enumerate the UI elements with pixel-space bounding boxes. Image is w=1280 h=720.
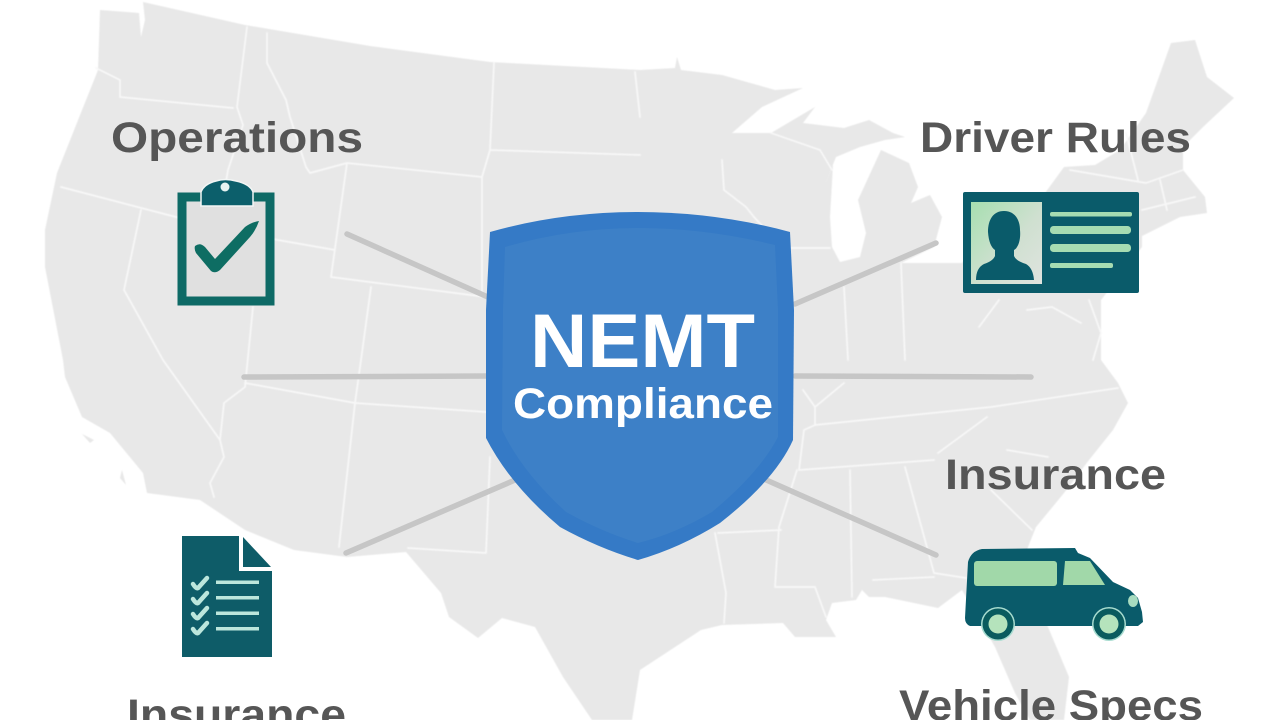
front window <box>1063 561 1105 585</box>
connector: insurance document <box>346 480 515 553</box>
connector: operations <box>347 234 490 298</box>
folded corner <box>243 537 271 567</box>
document body <box>182 536 272 657</box>
connector: vehicle <box>764 479 936 555</box>
central shield <box>486 212 794 560</box>
connector: west <box>244 376 490 377</box>
checkmark <box>195 221 259 272</box>
connector: east <box>795 376 1031 377</box>
headlight <box>1128 595 1138 607</box>
channel islands <box>82 434 126 485</box>
clip hole <box>220 182 230 192</box>
heading: Insurance (right): Insurance <box>945 451 1166 499</box>
text bar 4 <box>1050 263 1113 268</box>
icon: insurance document <box>182 536 272 657</box>
clipboard clip <box>201 180 253 206</box>
heading: Driver Rules: Driver Rules <box>920 114 1191 162</box>
shield title NEMT: NEMT <box>530 299 755 384</box>
clipboard paper <box>182 197 270 301</box>
person silhouette <box>976 211 1034 280</box>
checklist ticks <box>193 578 207 633</box>
card body <box>963 192 1139 293</box>
rear wheel <box>981 607 1015 641</box>
text bar 1 <box>1050 212 1132 216</box>
icon: clipboard with checkmark <box>182 180 270 301</box>
van body <box>965 548 1143 626</box>
connector: driver rules <box>795 243 936 304</box>
icon: driver ID card <box>963 192 1139 293</box>
shield inner face <box>502 228 778 543</box>
state borders <box>61 27 1195 623</box>
rear window <box>974 561 1057 586</box>
connector lines <box>244 234 1031 555</box>
shield outer border <box>486 212 794 560</box>
text bar 2 <box>1050 226 1131 234</box>
front wheel <box>1092 607 1126 641</box>
checklist lines <box>216 580 259 630</box>
shield subtitle Compliance: Compliance <box>513 380 773 428</box>
photo <box>971 202 1042 284</box>
heading: Operations: Operations <box>111 114 363 162</box>
icon: van <box>965 548 1143 641</box>
text bar 3 <box>1050 244 1131 252</box>
